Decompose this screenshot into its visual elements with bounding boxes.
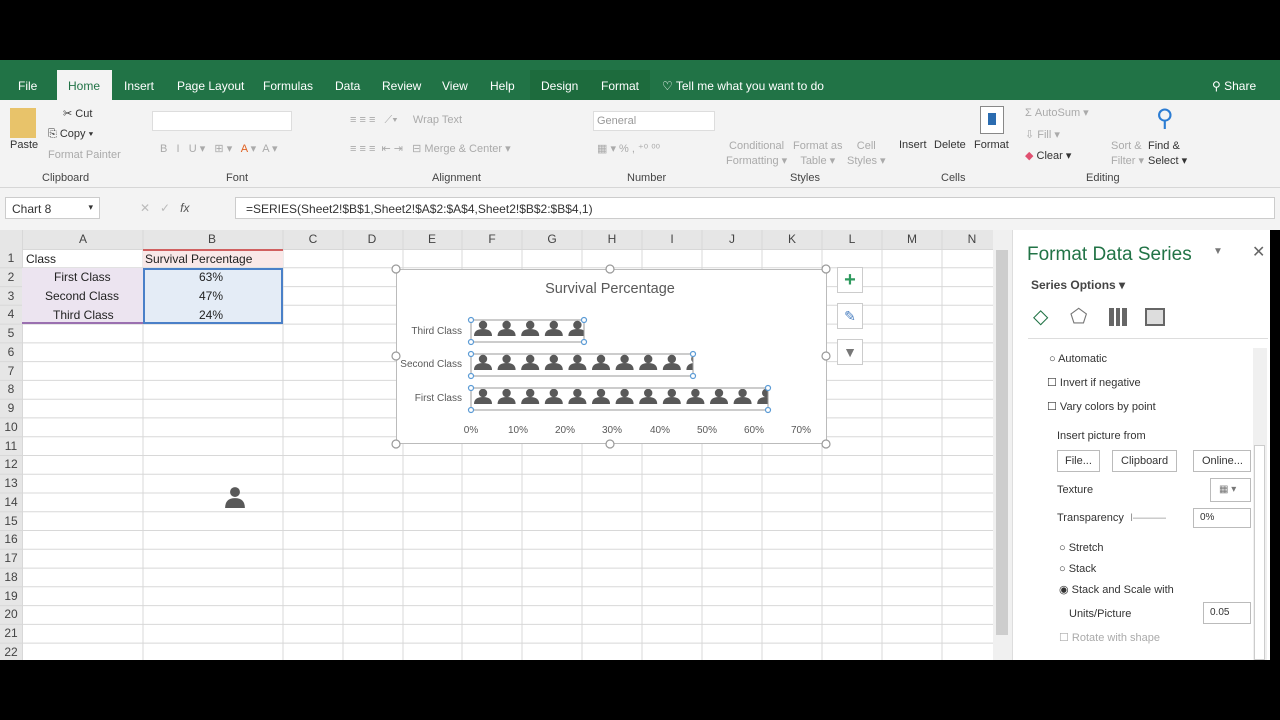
ribbon: Font — [226, 172, 248, 184]
ribbon: Select ▾ — [1148, 155, 1187, 167]
spreadsheet grid: 12 — [4, 457, 18, 471]
chart: Survival Percentage pictograph: 70% — [791, 425, 811, 436]
ribbon tabs — [18, 70, 1256, 100]
ribbon: Cells — [941, 172, 965, 184]
spreadsheet grid: 18 — [4, 570, 18, 584]
ribbon tabs: Format — [601, 79, 639, 93]
spreadsheet grid: 17 — [4, 551, 18, 565]
spreadsheet grid: K — [788, 232, 796, 246]
panel: Format Data Series: ☐ Invert if negative — [1047, 377, 1141, 389]
panel: Format Data Series: 0% — [1200, 512, 1214, 523]
data table: Class — [26, 252, 56, 266]
spreadsheet grid: 15 — [4, 514, 18, 528]
panel: Format Data Series: ▼ — [1213, 246, 1223, 257]
ribbon: Σ AutoSum ▾ — [1025, 107, 1089, 119]
data table: Survival Percentage — [145, 252, 252, 266]
panel: Format Data Series: File... — [1065, 455, 1092, 467]
ribbon tabs: Help — [490, 79, 515, 93]
ribbon tabs: Insert — [124, 79, 154, 93]
panel: Format Data Series: ☐ Rotate with shape — [1059, 632, 1160, 644]
ribbon tabs: Formulas — [263, 79, 313, 93]
spreadsheet grid: 14 — [4, 495, 18, 509]
icon: person in cell — [225, 487, 245, 508]
panel: Format Data Series — [1012, 230, 1270, 660]
chart: Survival Percentage pictograph: 30% — [602, 425, 622, 436]
spreadsheet grid: 10 — [4, 420, 18, 434]
spreadsheet grid: 21 — [4, 626, 18, 640]
spreadsheet grid: J — [729, 232, 735, 246]
ribbon: Conditional — [729, 140, 784, 152]
panel: Format Data Series: Units/Picture — [1069, 608, 1131, 620]
ribbon: B I U ▾ ⊞ ▾ A ▾ A ▾ — [160, 143, 278, 155]
ribbon: ▦ ▾ % , ⁺⁰ ⁰⁰ — [597, 143, 660, 155]
panel: Format Data Series: ○ Stretch — [1059, 542, 1104, 554]
chart side buttons: ✎ — [844, 308, 856, 324]
ribbon tabs: ♡ Tell me what you want to do — [662, 79, 824, 93]
chart side buttons: ▼ — [843, 344, 857, 360]
spreadsheet grid: 6 — [8, 345, 15, 359]
panel: Format Data Series: ▦ ▾ — [1219, 484, 1236, 495]
spreadsheet grid: 2 — [8, 270, 15, 284]
spreadsheet grid: 19 — [4, 589, 18, 603]
ribbon tabs: File — [18, 79, 37, 93]
spreadsheet grid: A — [79, 232, 87, 246]
ribbon tabs: Home — [68, 79, 100, 93]
spreadsheet grid: 16 — [4, 532, 18, 546]
spreadsheet grid: 3 — [8, 289, 15, 303]
ribbon: ◆ Clear ▾ — [1025, 150, 1071, 162]
spreadsheet grid: 20 — [4, 607, 18, 621]
formula bar: ▾ — [88, 202, 93, 212]
panel: Format Data Series: ⬠ — [1070, 306, 1087, 328]
spreadsheet grid: E — [428, 232, 436, 246]
chart side buttons: + — [844, 269, 856, 291]
ribbon: Filter ▾ — [1111, 155, 1144, 167]
ribbon: Cell — [857, 140, 876, 152]
ribbon: ⎘ Copy ▾ — [48, 128, 93, 140]
ribbon: Delete — [934, 139, 966, 151]
data table: Third Class — [53, 308, 114, 322]
spreadsheet grid: 1 — [8, 251, 15, 265]
ribbon: Styles ▾ — [847, 155, 886, 167]
chart: Survival Percentage pictograph: Third Class — [411, 326, 462, 337]
ribbon: Paste — [10, 139, 38, 151]
chart: Survival Percentage pictograph: 40% — [650, 425, 670, 436]
ribbon: ⇩ Fill ▾ — [1025, 129, 1060, 141]
ribbon: Format — [974, 139, 1009, 151]
spreadsheet grid: 7 — [8, 364, 15, 378]
formula bar: ✕ ✓ fx — [140, 201, 189, 215]
ribbon: Alignment — [432, 172, 481, 184]
chart: Survival Percentage pictograph: First Class — [415, 393, 462, 404]
spreadsheet grid: 5 — [8, 326, 15, 340]
panel: Format Data Series: 0.05 — [1210, 607, 1229, 618]
spreadsheet grid: 11 — [5, 439, 18, 453]
spreadsheet grid: 13 — [4, 476, 18, 490]
panel: Format Data Series: Format Data Series — [1027, 244, 1192, 265]
ribbon: Editing — [1086, 172, 1120, 184]
formula bar — [0, 188, 1280, 230]
spreadsheet grid: D — [368, 232, 377, 246]
ribbon tabs: View — [442, 79, 468, 93]
formula bar: =SERIES(Sheet2!$B$1,Sheet2!$A$2:$A$4,Sheet2!$B$2:$B$4,1) — [246, 202, 593, 216]
ribbon: ⚲ — [1156, 105, 1174, 132]
panel: Format Data Series: Online... — [1202, 455, 1243, 467]
panel: Format Data Series: ◉ Stack and Scale with — [1059, 584, 1174, 596]
ribbon: Format Painter — [48, 149, 121, 161]
spreadsheet grid: M — [907, 232, 917, 246]
ribbon tabs: ⚲ Share — [1212, 79, 1256, 93]
spreadsheet grid: F — [488, 232, 496, 246]
spreadsheet grid — [0, 230, 1012, 660]
panel: Format Data Series: ○ Automatic — [1049, 353, 1107, 365]
spreadsheet grid: L — [849, 232, 856, 246]
spreadsheet grid: N — [968, 232, 976, 246]
spreadsheet grid: 22 — [4, 645, 18, 659]
ribbon: Table ▾ — [800, 155, 835, 167]
spreadsheet grid: I — [670, 232, 674, 246]
spreadsheet grid: 4 — [8, 307, 15, 321]
data table: 63% — [199, 270, 223, 284]
ribbon: General — [597, 115, 636, 127]
chart: Survival Percentage pictograph — [391, 264, 831, 449]
data table — [22, 249, 283, 324]
chart: Survival Percentage pictograph: Second Class — [400, 359, 462, 370]
ribbon: Number — [627, 172, 666, 184]
panel: Format Data Series: ☐ Vary colors by point — [1047, 401, 1156, 413]
panel: Format Data Series: Texture — [1057, 484, 1093, 496]
ribbon: ≡ ≡ ≡ ⇤ ⇥ ⊟ Merge & Center ▾ — [350, 143, 511, 155]
spreadsheet grid: 8 — [8, 382, 15, 396]
title bar — [0, 60, 1280, 100]
chart: Survival Percentage pictograph: 10% — [508, 425, 528, 436]
panel: Format Data Series: Clipboard — [1121, 455, 1168, 467]
data table: First Class — [54, 270, 111, 284]
ribbon: ≡ ≡ ≡ ⟋▾ Wrap Text — [350, 114, 462, 126]
ribbon: Styles — [790, 172, 820, 184]
ribbon: Formatting ▾ — [726, 155, 787, 167]
ribbon: Format as — [793, 140, 843, 152]
ribbon tabs: Page Layout — [177, 79, 244, 93]
panel: Format Data Series: ✕ — [1252, 244, 1265, 261]
data table: 47% — [199, 289, 223, 303]
spreadsheet grid: G — [547, 232, 557, 246]
spreadsheet grid: B — [208, 232, 216, 246]
formula bar: Chart 8 — [12, 202, 51, 216]
ribbon: Sort & — [1111, 140, 1142, 152]
ribbon tabs: Review — [382, 79, 421, 93]
chart: Survival Percentage pictograph: 0% — [464, 425, 478, 436]
panel: Format Data Series: Transparency I——— — [1057, 512, 1166, 524]
panel: Format Data Series: ◇ — [1033, 306, 1048, 328]
data table: 24% — [199, 308, 223, 322]
chart: Survival Percentage pictograph: 50% — [697, 425, 717, 436]
ribbon: Find & — [1148, 140, 1180, 152]
panel: Format Data Series: ○ Stack — [1059, 563, 1096, 575]
chart side buttons — [837, 267, 863, 365]
spreadsheet grid: H — [608, 232, 616, 246]
ribbon tabs: Data — [335, 79, 360, 93]
panel: Format Data Series: Series Options ▾ — [1031, 278, 1125, 292]
ribbon tabs: Design — [541, 79, 578, 93]
ribbon: ✂ Cut — [63, 108, 92, 120]
spreadsheet grid: C — [309, 232, 318, 246]
ribbon — [0, 100, 1280, 188]
chart: Survival Percentage pictograph: Survival Percentage — [545, 281, 675, 297]
ribbon: Insert — [899, 139, 927, 151]
spreadsheet grid: 9 — [8, 401, 15, 415]
panel: Format Data Series: Insert picture from — [1057, 430, 1146, 442]
data table: Second Class — [45, 289, 119, 303]
ribbon: Clipboard — [42, 172, 89, 184]
chart: Survival Percentage pictograph: 60% — [744, 425, 764, 436]
chart: Survival Percentage pictograph: 20% — [555, 425, 575, 436]
